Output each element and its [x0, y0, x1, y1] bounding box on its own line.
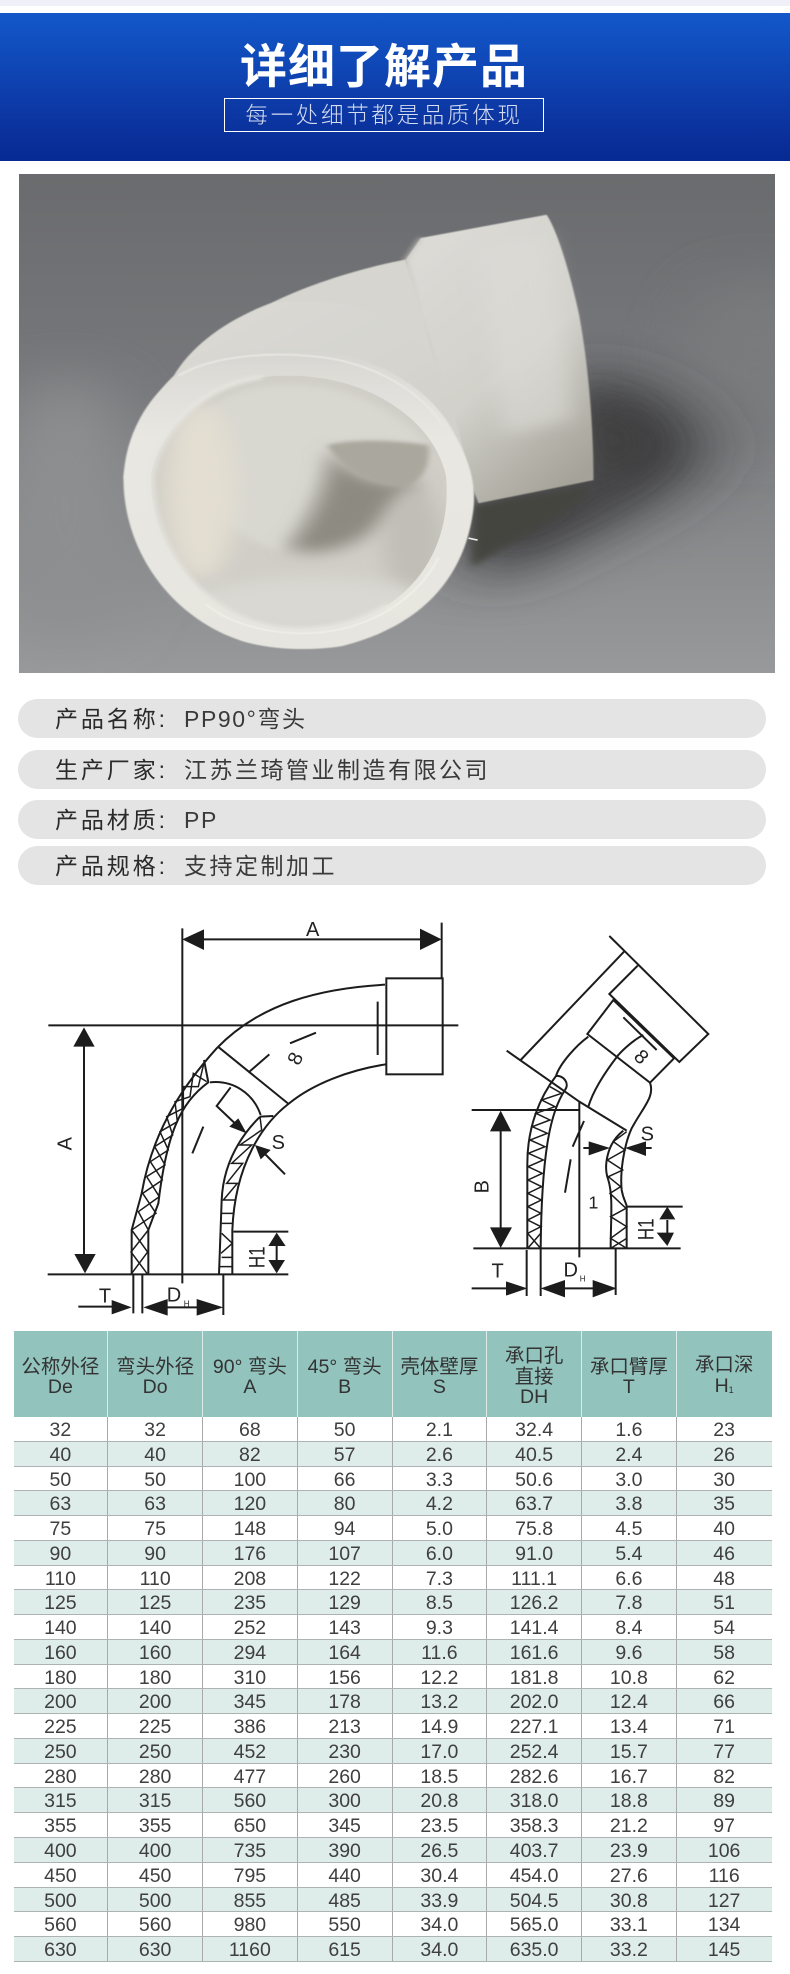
table body: 403.7: [510, 1840, 559, 1862]
spec row: material: [18, 800, 766, 839]
table body: 48: [713, 1568, 735, 1590]
table body: 252: [234, 1617, 266, 1639]
table body: 300: [328, 1790, 361, 1812]
table body: 280: [44, 1766, 77, 1788]
product photo: PP 90° elbow: [19, 174, 775, 673]
table body: 140: [44, 1617, 77, 1639]
table body: 615: [328, 1939, 361, 1961]
table body: 125: [44, 1592, 77, 1614]
table header: 直接: [515, 1366, 554, 1388]
table header: 公称外径: [21, 1356, 99, 1378]
dimension labels: 1: [588, 1192, 598, 1212]
table body: 160: [44, 1642, 77, 1664]
table body: 4.2: [426, 1493, 453, 1515]
table body: 13.4: [610, 1716, 648, 1738]
table header: 45° 弯头: [308, 1356, 382, 1378]
diagram: 90 degree elbow: [48, 919, 458, 1316]
table header: S: [433, 1376, 446, 1398]
subtitle box: [224, 98, 544, 132]
table body: 23.5: [420, 1815, 458, 1837]
technical drawings: [48, 919, 710, 1316]
arrowheads: [73, 929, 442, 1316]
table body: 17.0: [420, 1741, 458, 1763]
table body: 164: [328, 1642, 361, 1664]
table body: 34.0: [420, 1939, 458, 1961]
table body: 230: [328, 1741, 361, 1763]
table body: 40: [144, 1444, 166, 1466]
spec row: product name: [18, 699, 766, 738]
table body: 50: [50, 1469, 71, 1491]
table body: 477: [234, 1766, 266, 1788]
table body: 355: [44, 1815, 77, 1837]
diagram: 45 degree elbow: [471, 936, 708, 1297]
table body: 33.2: [610, 1939, 648, 1961]
table body: 10.8: [610, 1667, 648, 1689]
far pipe end crescent: [327, 441, 429, 487]
table body: 235: [234, 1592, 266, 1614]
table body: 735: [234, 1840, 266, 1862]
table body: 180: [44, 1667, 77, 1689]
table body: 315: [139, 1790, 171, 1812]
table body: 1.6: [615, 1419, 642, 1441]
table body: 23.9: [610, 1840, 648, 1862]
socket opening: [146, 372, 453, 634]
table body: 140: [139, 1617, 171, 1639]
spec row: product name: 产品名称:: [55, 706, 168, 732]
table body: 50: [144, 1469, 166, 1491]
table body: 156: [328, 1667, 361, 1689]
table body: 54: [713, 1617, 735, 1639]
table body: 2.6: [426, 1444, 453, 1466]
table header: De: [48, 1376, 73, 1398]
arrowheads: [490, 1111, 675, 1297]
elbow body: [272, 259, 425, 348]
dimension labels: A: [306, 919, 320, 941]
dimension labels: 8: [629, 1046, 653, 1069]
table body: 40: [713, 1518, 735, 1540]
spec row: material: PP: [184, 807, 218, 833]
table header: 90° 弯头: [213, 1356, 287, 1378]
table body: 13.2: [420, 1691, 458, 1713]
table body: 94: [334, 1518, 355, 1540]
table body: 75: [144, 1518, 166, 1540]
table body: 107: [328, 1543, 361, 1565]
dimension labels: H1: [634, 1218, 659, 1240]
table body: 630: [44, 1939, 77, 1961]
table body: 26.5: [420, 1840, 458, 1862]
table body: 252.4: [510, 1741, 559, 1763]
table body: 176: [234, 1543, 266, 1565]
table body: 7.8: [615, 1592, 642, 1614]
table body: 89: [713, 1790, 735, 1812]
dimension labels: D: [563, 1260, 578, 1282]
table body: 33.9: [420, 1890, 458, 1912]
table body: 12.4: [610, 1691, 648, 1713]
table body: 225: [139, 1716, 171, 1738]
table body: 145: [708, 1939, 740, 1961]
table body: 143: [328, 1617, 361, 1639]
table body: 62: [713, 1667, 735, 1689]
table body: 200: [139, 1691, 171, 1713]
soft opening edge: [151, 377, 388, 629]
dimension labels: H: [184, 1299, 190, 1308]
table header: 承口孔: [505, 1345, 563, 1367]
table body: 68: [239, 1419, 261, 1441]
table body: 282.6: [510, 1766, 559, 1788]
table body: 46: [713, 1543, 735, 1565]
table body: 12.2: [420, 1667, 458, 1689]
table header: 承口臂厚: [590, 1356, 668, 1378]
rim lip: [179, 354, 407, 389]
table body: 200: [44, 1691, 77, 1713]
table body: 126.2: [510, 1592, 559, 1614]
table body: 14.9: [420, 1716, 458, 1738]
table body: 400: [139, 1840, 171, 1862]
table body: 250: [139, 1741, 171, 1763]
spec row: size: [18, 846, 766, 885]
table body: 16.7: [610, 1766, 648, 1788]
table header: 弯头外径: [116, 1356, 194, 1378]
table body: 3.3: [426, 1469, 453, 1491]
table header: B: [338, 1376, 351, 1398]
table body: 180: [139, 1667, 171, 1689]
spec row: manufacturer: 江苏兰琦管业制造有限公司: [184, 757, 490, 783]
table body: 6.0: [426, 1543, 453, 1565]
table body: 97: [713, 1815, 735, 1837]
table body: 57: [334, 1444, 355, 1466]
table body: 6.6: [615, 1568, 642, 1590]
table body: 5.4: [615, 1543, 642, 1565]
table body: 310: [234, 1667, 266, 1689]
table body: 504.5: [510, 1890, 559, 1912]
table body: 66: [334, 1469, 355, 1491]
table body: 15.7: [610, 1741, 648, 1763]
table body: 110: [45, 1568, 76, 1590]
table body: 21.2: [610, 1815, 648, 1837]
table body: 181.8: [510, 1667, 559, 1689]
table body: 18.5: [420, 1766, 458, 1788]
table body: 345: [234, 1691, 266, 1713]
table body: 400: [44, 1840, 77, 1862]
moulding sprue: [469, 538, 478, 540]
table body: 635.0: [510, 1939, 559, 1961]
table header: H1: [715, 1374, 734, 1396]
table body: 27.6: [610, 1865, 648, 1887]
table body: 30.8: [610, 1890, 648, 1912]
dimension labels: S: [641, 1123, 654, 1145]
wall hatching: [528, 1087, 562, 1248]
table header: 承口深: [695, 1354, 753, 1376]
table body: 2.4: [615, 1444, 642, 1466]
table body: 34.0: [420, 1914, 458, 1936]
table body: 75.8: [515, 1518, 553, 1540]
table body: 500: [44, 1890, 77, 1912]
table body: 4.5: [615, 1518, 642, 1540]
table body: 63: [50, 1493, 71, 1515]
dimension labels: B: [471, 1180, 493, 1193]
table header: A: [243, 1376, 256, 1398]
table body: 1160: [229, 1939, 271, 1961]
table body: 260: [328, 1766, 361, 1788]
front rim: [123, 349, 474, 649]
table body: 82: [713, 1766, 735, 1788]
table body: 80: [334, 1493, 355, 1515]
table body: 120: [234, 1493, 266, 1515]
table body: 318.0: [510, 1790, 559, 1812]
dimension labels: [471, 1046, 659, 1284]
specification table: [14, 1331, 772, 1962]
table body: 51: [713, 1592, 735, 1614]
table body: 122: [328, 1568, 361, 1590]
dimension labels: [55, 919, 320, 1308]
spec row: size: 支持定制加工: [184, 853, 337, 879]
dimension labels: H: [580, 1275, 586, 1284]
table body: 5.0: [426, 1518, 453, 1540]
table body: 32: [50, 1419, 71, 1441]
dimension labels: T: [99, 1285, 111, 1307]
table body: 160: [139, 1642, 171, 1664]
table body: 560: [139, 1914, 171, 1936]
table body: 50: [334, 1419, 355, 1441]
spec row: material: 产品材质:: [55, 807, 168, 833]
title: 详细了解产品: [240, 40, 528, 93]
table body: 390: [328, 1840, 361, 1862]
table body: 129: [328, 1592, 361, 1614]
spec row: manufacturer: 生产厂家:: [55, 757, 168, 783]
top strip: [0, 0, 790, 6]
dimension labels: D: [167, 1285, 181, 1307]
table body: [14, 1417, 772, 1962]
table body: 650: [234, 1815, 266, 1837]
table body: 7.3: [426, 1568, 453, 1590]
table body: 550: [328, 1914, 361, 1936]
table body: 66: [713, 1691, 735, 1713]
table body: 9.6: [615, 1642, 642, 1664]
table body: 8.4: [615, 1617, 642, 1639]
table body: 250: [44, 1741, 77, 1763]
far socket: [406, 215, 593, 503]
table body: 227.1: [510, 1716, 559, 1738]
table body: 11.6: [421, 1642, 458, 1664]
table body: 225: [44, 1716, 77, 1738]
table body: 315: [44, 1790, 77, 1812]
table body: 18.8: [610, 1790, 648, 1812]
table header: 壳体壁厚: [400, 1356, 478, 1378]
table body: 795: [234, 1865, 266, 1887]
table body: 30: [713, 1469, 735, 1491]
table body: 3.8: [615, 1493, 642, 1515]
table body: 40.5: [515, 1444, 553, 1466]
table body: 33.1: [610, 1914, 648, 1936]
table body: 565.0: [510, 1914, 559, 1936]
socket highlight: [502, 340, 576, 432]
table body: 980: [234, 1914, 266, 1936]
table body: 8.5: [426, 1592, 453, 1614]
table body: 280: [139, 1766, 171, 1788]
socket chamfer: [401, 236, 422, 269]
spec row: size: 产品规格:: [55, 853, 168, 879]
table body: 23: [713, 1419, 735, 1441]
table body: 178: [328, 1691, 361, 1713]
table body: 90: [144, 1543, 166, 1565]
wall hatching: [131, 1063, 204, 1274]
table body: 90: [50, 1543, 71, 1565]
dimension labels: A: [55, 1136, 77, 1150]
table body: 125: [139, 1592, 171, 1614]
table body: 500: [139, 1890, 171, 1912]
table body: 208: [234, 1568, 266, 1590]
table body: 9.3: [426, 1617, 453, 1639]
dimension labels: S: [272, 1132, 285, 1154]
near socket bulge: [123, 301, 474, 495]
table body: 202.0: [510, 1691, 559, 1713]
table body: 355: [139, 1815, 171, 1837]
table body: 440: [328, 1865, 361, 1887]
cast shadow: [463, 372, 705, 578]
table body: 386: [234, 1716, 266, 1738]
table body: 161.6: [510, 1642, 559, 1664]
spec row: manufacturer: [18, 750, 766, 789]
table body: 560: [44, 1914, 77, 1936]
table body: 50.6: [515, 1469, 553, 1491]
table body: 58: [713, 1642, 735, 1664]
table body: 82: [239, 1444, 261, 1466]
table body: 345: [328, 1815, 361, 1837]
table body: 32: [144, 1419, 166, 1441]
table header: [14, 1331, 772, 1417]
table body: 100: [234, 1469, 266, 1491]
table body: 141.4: [510, 1617, 559, 1639]
dimension labels: T: [492, 1260, 504, 1282]
table body: 3.0: [615, 1469, 642, 1491]
dimension labels: H1: [245, 1246, 270, 1268]
table body: 110: [140, 1568, 171, 1590]
table body: 148: [234, 1518, 266, 1540]
table body: 77: [713, 1741, 735, 1763]
table body: 75: [50, 1518, 71, 1540]
table body: 630: [139, 1939, 171, 1961]
table body: 134: [708, 1914, 740, 1936]
table body: 213: [328, 1716, 361, 1738]
table body: 20.8: [420, 1790, 458, 1812]
table body: 26: [713, 1444, 735, 1466]
table body: 116: [709, 1865, 740, 1887]
spec row: product name: PP90°弯头: [184, 706, 307, 732]
table body: 358.3: [510, 1815, 559, 1837]
table header: Do: [143, 1376, 168, 1398]
table body: 454.0: [510, 1865, 559, 1887]
banner: [0, 13, 790, 161]
table body: 30.4: [420, 1865, 458, 1887]
table body: 560: [234, 1790, 266, 1812]
table body: 450: [139, 1865, 171, 1887]
table body: 71: [713, 1716, 735, 1738]
table body: 855: [234, 1890, 266, 1912]
table body: 40: [50, 1444, 71, 1466]
table body: 452: [234, 1741, 266, 1763]
table header: DH: [520, 1386, 548, 1408]
table body: 111.1: [511, 1568, 557, 1590]
table body: 63: [144, 1493, 166, 1515]
table body: 63.7: [515, 1493, 553, 1515]
dimension labels: 8: [284, 1049, 308, 1068]
table body: 127: [708, 1890, 740, 1912]
table body: 294: [234, 1642, 266, 1664]
table body: 35: [713, 1493, 735, 1515]
backdrop: [19, 174, 775, 673]
subtitle box: 每一处细节都是品质体现: [245, 103, 523, 128]
table header: T: [623, 1376, 635, 1398]
table body: 32.4: [515, 1419, 553, 1441]
table body: 2.1: [426, 1419, 453, 1441]
table body: 106: [708, 1840, 740, 1862]
inner rim glint: [207, 558, 438, 633]
table body: 91.0: [515, 1543, 553, 1565]
table body: 485: [328, 1890, 361, 1912]
table body: 450: [44, 1865, 77, 1887]
